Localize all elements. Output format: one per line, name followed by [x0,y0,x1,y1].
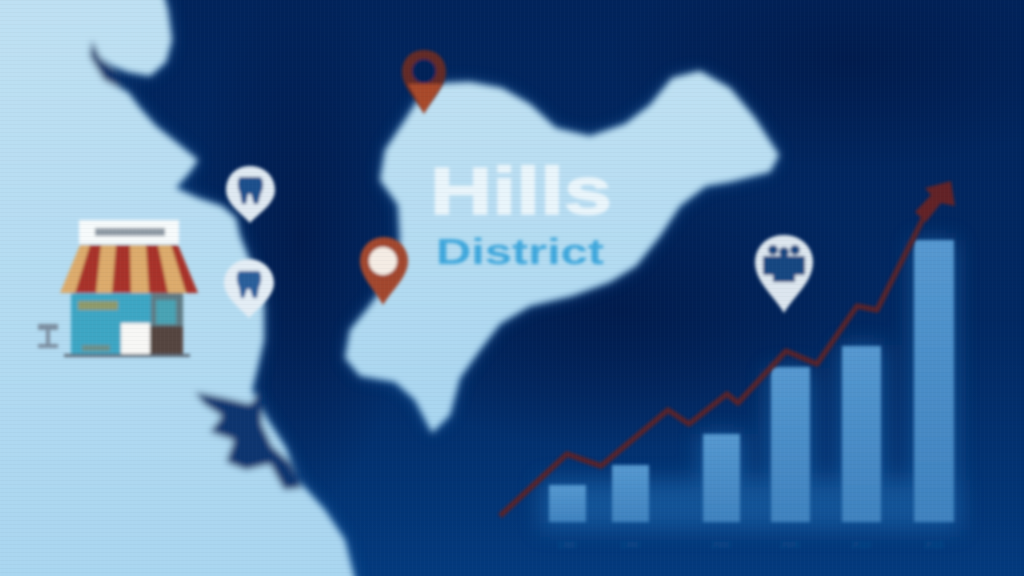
icon: tooth pin lower [224,259,274,318]
subtitle: District: District [436,231,604,272]
bar axis labels: 2015 [924,540,944,550]
bars [549,240,954,522]
shop sign [79,220,179,244]
bar chart [540,240,960,550]
bar axis labels: 1990 [620,540,640,550]
bar axis labels [557,540,944,550]
bar axis labels: 2005 [780,540,800,550]
icon: people pin [755,235,813,313]
bar axis labels: 2010 [851,540,871,550]
icon: tooth pin upper [226,166,275,223]
icon: middle orange map pin [360,237,408,305]
map: Hills District landmass [345,71,779,433]
map: land glow [0,0,779,576]
map: left coastline landmass [0,0,360,576]
title: Hills: Hills [430,154,612,229]
shop awning [60,245,198,293]
chart glow [540,240,960,530]
shop front [64,293,190,357]
bar axis labels: 2000 [711,540,731,550]
icon: storefront illustration [38,220,198,357]
cafe table [38,324,58,348]
icon: top orange map pin [402,50,446,114]
arrow: growth trend line [500,181,955,516]
bar axis labels: 1980 [557,540,577,550]
